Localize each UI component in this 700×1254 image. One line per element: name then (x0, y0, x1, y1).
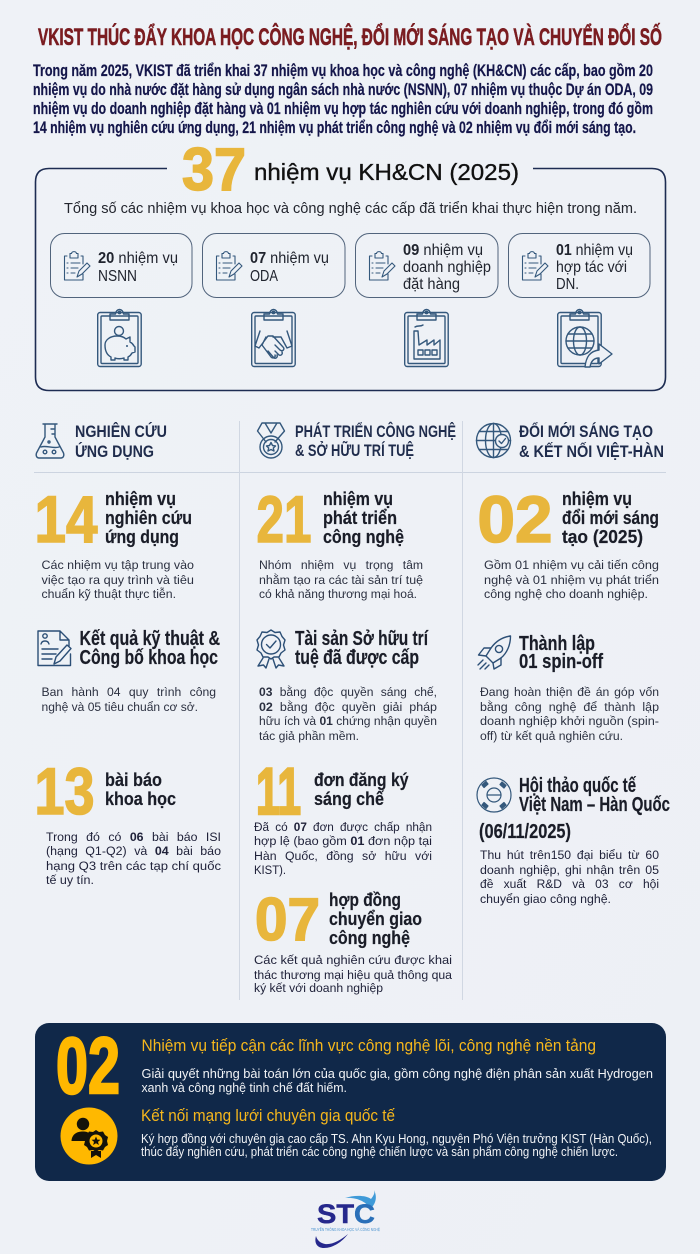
stat 21: nhiệm vụ (323, 488, 393, 509)
logo: STC (311, 1190, 380, 1248)
description: hạng Q3 trên các tạp chí quốc (46, 859, 221, 873)
description: việc tạo ra quy trình và tiêu (42, 573, 194, 587)
description: nhằm tạo ra các tài sản trí tuệ (259, 572, 423, 587)
description: nghệ và 01 nhiệm vụ phát triển (484, 573, 659, 587)
icon: checklist (216, 252, 242, 280)
description: tế uy tín. (46, 873, 94, 887)
column 2: technology and IP (254, 422, 456, 995)
description (254, 820, 432, 877)
icon: checklist (64, 252, 90, 280)
stat 11 (256, 754, 409, 828)
stat 11: sáng chế (314, 788, 385, 809)
panel: dark summary (35, 1021, 666, 1181)
big number 02: 02 (56, 1021, 120, 1110)
icon: award ribbon (257, 630, 285, 668)
column heading: ỨNG DỤNG (75, 442, 154, 461)
icon: checklist (522, 252, 548, 280)
column heading: & SỞ HỮU TRÍ TUỆ (295, 440, 414, 460)
icon: medal (258, 423, 284, 458)
description: Hàn Quốc, đồng sở hữu với (254, 849, 432, 863)
subheading: international workshop (479, 774, 670, 843)
description: đề xuất R&D và 03 cơ hội (480, 877, 659, 891)
subheading: spin-off (519, 632, 603, 673)
stat 07: hợp đồng (329, 889, 401, 910)
icon: document with pencil (38, 631, 71, 666)
card text (250, 250, 329, 285)
stat 13 (34, 754, 176, 828)
column dividers (34, 421, 666, 1000)
description (480, 848, 659, 906)
column heading (295, 422, 456, 460)
card: enterprise orders (356, 234, 498, 298)
subheading: spin-off: Thành lập (519, 632, 595, 655)
description: 02 bằng độc quyền giải pháp (259, 699, 437, 714)
card: enterprise cooperation (508, 234, 650, 298)
description: chuẩn kỹ thuật thực tiễn. (42, 586, 176, 601)
heading: expert network: Kết nối mạng lưới chuyên gia quốc tế (141, 1107, 395, 1125)
text: core technologies: xanh và công nghệ tinh chế đất hiếm. (142, 1080, 347, 1095)
icon: Korean flag emblem (477, 778, 511, 812)
stat 14: nhiệm vụ (105, 488, 176, 509)
stat 13: bài báo (105, 769, 162, 790)
logo: STC: STC (317, 1199, 375, 1229)
stat 02: tạo (2025) (562, 526, 643, 547)
description: tác giả phần mềm. (259, 729, 359, 743)
stat 07 (255, 886, 422, 953)
stat 02: đổi mới sáng (562, 507, 659, 528)
subheading: IP assets: tuệ đã được cấp (295, 646, 419, 669)
card text (403, 242, 491, 293)
description: off) từ kết quả nghiên cứu. (480, 729, 623, 743)
intro paragraph (33, 62, 653, 137)
text: core technologies (142, 1066, 653, 1095)
card text: NSNN (98, 268, 137, 285)
icon: expert badge (60, 1108, 118, 1164)
description: có khả năng thương mại hoá. (259, 587, 417, 601)
subheading: international workshop: (06/11/2025) (479, 820, 571, 843)
big number 37: 37 (182, 136, 246, 203)
icon: checklist (370, 252, 395, 280)
stat 02 (478, 482, 659, 556)
heading: core technologies: Nhiệm vụ tiếp cận các lĩnh vực công nghệ lõi, công nghệ nền tảng (142, 1037, 596, 1055)
icon: flask (36, 424, 64, 458)
stat 21: phát triển (323, 507, 397, 528)
stat 13: khoa học (105, 788, 176, 809)
icon: rocket (478, 636, 510, 669)
stat 21: 21 (256, 482, 312, 556)
description (42, 558, 194, 601)
text: expert network (141, 1131, 652, 1159)
stat 14: ứng dụng (105, 526, 179, 547)
subheading: spin-off: 01 spin-off (519, 650, 603, 673)
stat 14: nghiên cứu (105, 507, 192, 528)
description: công nghệ cho doanh nghiệp. (484, 587, 648, 601)
card text: DN. (556, 276, 579, 293)
stat 21 (256, 482, 404, 556)
description: Nhóm nhiệm vụ trọng tâm (259, 558, 423, 572)
stat 02: nhiệm vụ (562, 488, 632, 509)
description: hữu ích và 01 chứng nhận quyền (259, 714, 437, 728)
description (484, 558, 659, 601)
description: (hạng Q1-Q2) và 04 bài báo (46, 844, 221, 858)
stat 11: đơn đăng ký (314, 769, 409, 790)
description: Các nhiệm vụ tập trung vào (42, 558, 194, 572)
card text: hợp tác với (556, 259, 627, 276)
column heading (519, 422, 664, 461)
description: Đang hoàn thiện đề án góp vốn (480, 685, 659, 699)
subheading: IP assets: Tài sản Sở hữu trí (295, 627, 429, 650)
card: ODA (202, 234, 345, 298)
description: Thu hút trên150 đại biểu từ 60 (480, 848, 659, 862)
column 1: applied research (34, 422, 221, 887)
description: Đã có 07 đơn được chấp nhận (254, 820, 432, 834)
logo: STC: TRUYỀN THÔNG KHOA HỌC VÀ CÔNG NGHỆ (311, 1225, 380, 1232)
subheading: technical results (80, 627, 220, 669)
subheading: IP assets (295, 627, 429, 669)
icon: globe with check (476, 424, 510, 458)
icon: clipboard factory (405, 310, 448, 366)
description (254, 953, 452, 995)
panel subtitle: Tổng số các nhiệm vụ khoa học và công nghệ các cấp đã triển khai thực hiện trong năm. (64, 200, 637, 217)
icon: clipboard handshake (252, 310, 295, 366)
subheading: technical results: Công bố khoa học (80, 646, 218, 669)
stat 07: công nghệ (329, 927, 410, 948)
stat 13: 13 (34, 754, 94, 828)
stat 11: 11 (256, 754, 301, 828)
stat 07: 07 (255, 886, 320, 953)
card text: 07 nhiệm vụ (250, 250, 329, 267)
description: KIST). (254, 863, 286, 877)
column heading: PHÁT TRIỂN CÔNG NGHỆ (295, 422, 456, 441)
panel heading: nhiệm vụ KH&CN (2025) (254, 159, 519, 185)
subheading: international workshop: Hội thảo quốc tế (519, 774, 636, 797)
card text: đặt hàng (403, 276, 460, 293)
column heading: ĐỔI MỚI SÁNG TẠO (519, 422, 653, 441)
column heading (75, 422, 167, 461)
description: chuyển giao công nghệ. (480, 892, 611, 906)
description (46, 830, 221, 887)
card: NSNN (50, 234, 192, 298)
stat 07: chuyển giao (329, 908, 422, 929)
description: doanh nghiệp khởi nguồn (spin- (480, 714, 659, 728)
card text: 01 nhiệm vụ (556, 242, 633, 259)
description: Các kết quả nghiên cứu được khai (254, 953, 452, 967)
description: Gồm 01 nhiệm vụ cải tiến công (484, 558, 659, 572)
description (259, 684, 437, 743)
column 3: innovation and Vietnam-Korea (476, 422, 670, 906)
stat 14 (34, 482, 192, 556)
description: 03 bằng độc quyền sáng chế, (259, 684, 437, 699)
description: nghệ và 05 tiêu chuẩn cơ sở. (42, 700, 198, 714)
column heading: & KẾT NỐI VIỆT-HÀN (519, 441, 664, 461)
description: Trong đó có 06 bài báo ISI (46, 830, 221, 844)
description: doanh nghiệp, ghi nhận trên 05 (480, 863, 659, 877)
card text: doanh nghiệp (403, 259, 491, 276)
card text: ODA (250, 268, 279, 285)
description: bằng công nghệ để thành lập (480, 699, 659, 714)
description: thác thương mại hiệu quả thông qua (254, 968, 452, 982)
subheading: technical results: Kết quả kỹ thuật & (80, 627, 220, 650)
card text (556, 242, 633, 293)
column heading: NGHIÊN CỨU (75, 422, 167, 441)
description: hợp lệ (bao gồm 01 đơn nộp tại (254, 834, 432, 848)
card text (98, 250, 178, 285)
description (480, 685, 659, 743)
description (259, 558, 423, 601)
icon: clipboard globe (558, 310, 612, 367)
stat 02: 02 (478, 482, 552, 556)
card text: 09 nhiệm vụ (403, 242, 483, 259)
icon: clipboard piggy bank (98, 310, 141, 366)
text: core technologies: Giải quyết những bài toán lớn của quốc gia, gồm công nghệ điện phân sản xuất Hydrogen (142, 1066, 653, 1081)
stat 21: công nghệ (323, 526, 404, 547)
panel outline (36, 168, 666, 390)
description: Ban hành 04 quy trình công (42, 685, 216, 699)
stat 14: 14 (34, 482, 98, 556)
text: expert network: thúc đẩy nghiên cứu, phát triển các công nghệ chiến lược và sản phẩm công nghệ chiến lược. (141, 1144, 618, 1159)
card text: 20 nhiệm vụ (98, 250, 178, 267)
description (42, 685, 216, 714)
panel: 37 tasks (36, 136, 666, 390)
description: ký kết với doanh nghiệp (254, 981, 383, 995)
